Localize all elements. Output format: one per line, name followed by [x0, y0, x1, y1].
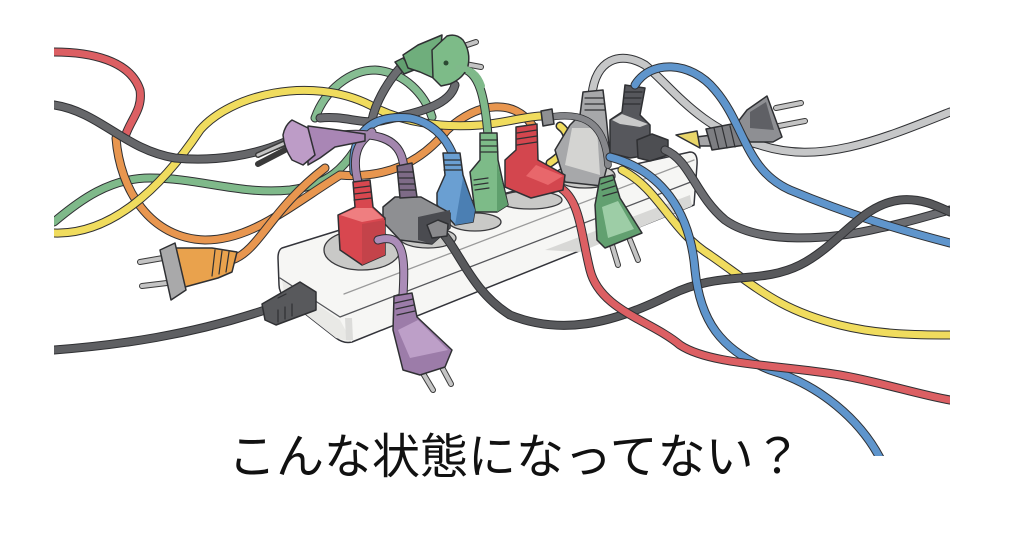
cable: red long — [555, 185, 950, 400]
plug: green lower — [595, 175, 642, 265]
cable: gray left — [54, 105, 285, 159]
power strip — [278, 152, 697, 342]
illustration: tangled cables and power strip — [54, 34, 950, 456]
cable: dark gray right — [665, 150, 950, 238]
cable: green to socket — [460, 68, 488, 135]
plug: black power — [262, 282, 316, 325]
cable: green loop — [315, 70, 432, 118]
socket wells — [324, 164, 615, 270]
cable: black long — [438, 200, 950, 325]
cable: blue upper right — [635, 67, 950, 243]
plug: right gray — [676, 96, 805, 150]
cable: gray small arc — [545, 116, 608, 165]
socket: dark gray — [610, 85, 650, 158]
socket: gray right — [555, 90, 610, 186]
cable: purple arcs — [340, 132, 404, 182]
small gray sleeve — [541, 109, 554, 126]
socket: blue — [437, 153, 475, 225]
cable: orange from plug — [232, 168, 325, 260]
cable: blue arc — [354, 118, 453, 172]
socket: dark center — [383, 163, 450, 244]
cable: yellow long left — [54, 90, 548, 233]
socket: red right — [505, 124, 565, 198]
cable: black power — [54, 310, 265, 350]
cable: yellow right — [622, 170, 950, 335]
plug: purple bottom — [393, 293, 452, 390]
cable: orange main — [116, 107, 532, 240]
plug: purple left — [258, 120, 365, 165]
cable: green low — [54, 150, 355, 222]
cable: blue lower — [610, 157, 880, 458]
cable: short yellow arc — [550, 126, 567, 163]
cable: red top left — [54, 52, 140, 137]
cable: gray arcs under green plug — [320, 68, 455, 122]
plug: green top — [395, 35, 481, 86]
plug: orange — [140, 243, 237, 300]
cable: purple bottom — [378, 239, 404, 295]
cable: green stub over plug — [458, 68, 482, 86]
title: こんな状態になってない？ — [228, 431, 802, 484]
cable: light gray right — [592, 58, 950, 152]
socket: red left — [338, 180, 385, 265]
small black socket — [637, 134, 668, 161]
socket: green — [470, 133, 508, 212]
